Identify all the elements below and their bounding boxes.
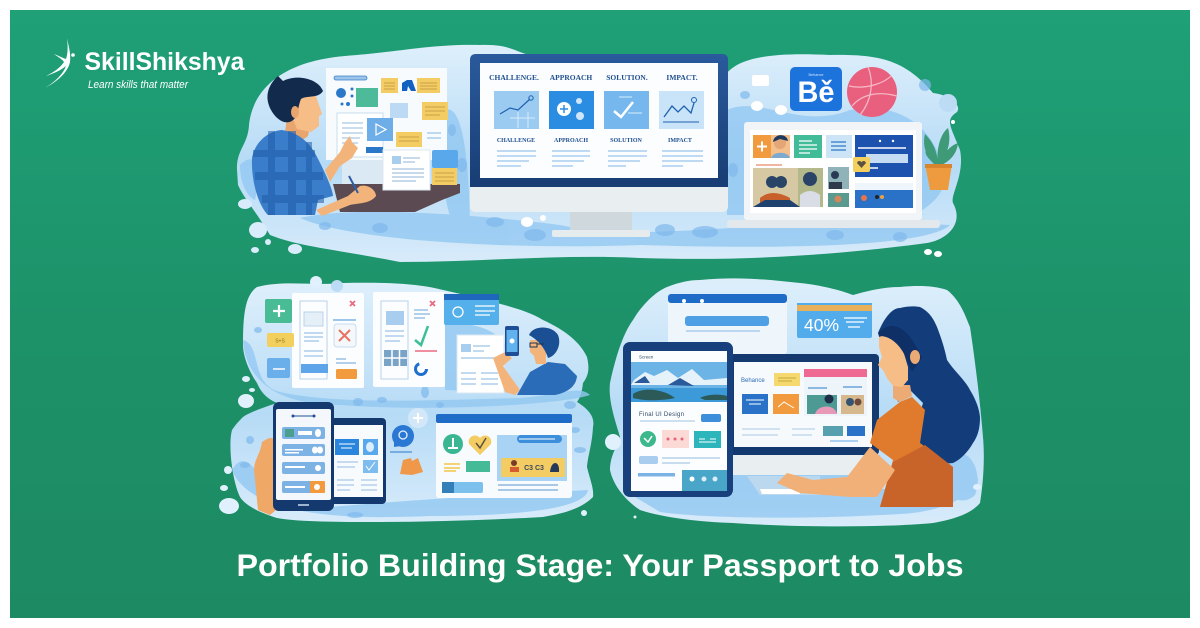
icon: dribbble	[847, 67, 897, 117]
chat check icon	[640, 431, 656, 447]
close mark	[430, 301, 435, 306]
light header	[797, 297, 872, 303]
column subheadings: CHALLENGE	[497, 138, 535, 144]
heart badge	[469, 436, 491, 455]
check	[476, 438, 486, 448]
mountains	[631, 369, 727, 385]
lid	[744, 122, 922, 220]
note lines	[778, 378, 796, 381]
yellow notes	[381, 78, 448, 147]
sky panel	[497, 435, 567, 481]
panel lines	[808, 387, 862, 388]
column headings: APPROACH	[550, 73, 592, 82]
icon: check mark	[415, 326, 428, 345]
row content	[285, 429, 323, 490]
column subheadings	[497, 138, 692, 144]
thumbnail	[386, 311, 404, 325]
tablet behind phone	[326, 418, 386, 504]
woman at computer	[777, 306, 980, 507]
blue wash	[635, 453, 978, 518]
screen	[734, 362, 872, 447]
keys	[760, 489, 800, 494]
speckles	[240, 327, 586, 518]
tablet heading: Screen	[639, 354, 654, 360]
pen	[349, 176, 358, 193]
yellow scene	[501, 458, 565, 477]
tile: impact	[659, 91, 704, 129]
face	[290, 94, 322, 132]
writing arm	[316, 186, 376, 216]
speckles	[319, 79, 931, 242]
thumbnail	[304, 312, 323, 326]
shoreline	[633, 390, 727, 400]
orange book icon	[400, 458, 423, 475]
yellow note tab: S+S	[275, 338, 285, 344]
stat card	[797, 297, 872, 338]
light play tile	[390, 103, 408, 118]
statistic: 40%	[804, 315, 839, 335]
wireframe card with check	[373, 292, 445, 387]
document on board	[337, 113, 383, 157]
light tile	[826, 135, 852, 158]
card header	[855, 183, 913, 190]
footer thumbs	[823, 426, 865, 436]
pink header panel	[804, 369, 867, 416]
yellow sticky	[432, 168, 457, 185]
icon: error cross	[339, 330, 350, 341]
icon: behance: Behance	[808, 73, 824, 77]
keyboard	[747, 476, 820, 495]
neck and face	[530, 340, 546, 364]
orange tile	[773, 394, 799, 414]
column subheadings: APPROACH	[554, 138, 588, 144]
blue rule	[333, 319, 356, 321]
arm	[777, 447, 895, 497]
mountain shadow	[634, 376, 694, 386]
hair	[267, 76, 323, 122]
design title: Final UI Design	[639, 412, 684, 418]
text lines right	[414, 310, 430, 318]
small photo bottom	[828, 193, 849, 207]
small photo top	[828, 167, 849, 189]
pink header	[804, 369, 867, 377]
bezel	[725, 354, 879, 455]
card	[373, 292, 445, 387]
icon: behance	[790, 67, 842, 111]
ear	[291, 106, 299, 118]
wireframe	[300, 301, 327, 379]
action bar	[301, 364, 328, 373]
header dots	[292, 414, 316, 418]
stat lines	[844, 318, 867, 327]
photo group	[753, 168, 823, 207]
screen	[750, 130, 916, 213]
gear dots	[340, 88, 354, 106]
text lines	[385, 331, 404, 341]
orange button	[336, 369, 357, 379]
icon: behance: Bě	[798, 76, 834, 109]
chat bubble	[392, 425, 414, 447]
blue sticky	[432, 150, 458, 168]
document thumb	[461, 344, 471, 352]
green tile lines	[799, 141, 817, 153]
man with phone	[457, 326, 577, 395]
glasses	[530, 343, 544, 347]
blue tile	[742, 394, 768, 414]
cloud backdrop	[610, 278, 984, 526]
base	[552, 230, 650, 237]
desktop monitor	[470, 54, 728, 237]
shirt checks	[253, 131, 324, 215]
blue chip	[442, 482, 483, 493]
pink dots tile	[662, 430, 689, 448]
blue arrow tab	[267, 358, 290, 378]
yellow note tab	[267, 333, 294, 347]
tile: challenge	[494, 91, 539, 129]
wireframe	[381, 301, 408, 379]
screen	[631, 351, 727, 491]
title: Portfolio Building Stage: Your Passport to Jobs	[236, 547, 963, 583]
title bar	[668, 294, 787, 303]
note lines	[384, 83, 445, 141]
blue tile lines	[746, 400, 764, 404]
navy panel	[855, 135, 913, 177]
column headings	[489, 73, 698, 82]
behance and dribbble icons	[790, 67, 897, 117]
board	[326, 68, 447, 160]
pill line	[519, 438, 555, 440]
bottom lines	[498, 485, 558, 490]
check	[366, 462, 375, 470]
tablet screen	[334, 425, 383, 497]
thumbnail	[285, 429, 294, 437]
sticky lines	[435, 173, 454, 181]
caption line	[686, 330, 760, 332]
green circle	[443, 434, 463, 454]
heading lines	[756, 164, 782, 166]
cloud backdrop	[237, 45, 961, 262]
error box	[334, 324, 356, 347]
play tile	[367, 118, 393, 141]
button	[366, 147, 383, 153]
brand name: SkillShikshya	[84, 49, 245, 76]
plus	[757, 142, 767, 152]
chin	[733, 455, 873, 475]
amber band	[797, 305, 872, 311]
green plus tab	[265, 299, 292, 323]
play glyph	[376, 124, 386, 135]
light pill	[639, 456, 658, 464]
bezel	[470, 54, 728, 187]
chin	[470, 187, 728, 212]
board legs shading	[342, 160, 402, 184]
panel: wireframes and responsive design scene	[219, 276, 593, 522]
tile: solution	[604, 91, 649, 129]
photos	[807, 394, 864, 414]
blue label	[638, 473, 675, 476]
ear	[910, 350, 920, 364]
column text lines	[497, 151, 703, 166]
hair back	[878, 306, 980, 463]
card	[292, 293, 364, 388]
phone	[505, 326, 519, 356]
orange tile chart	[778, 402, 794, 408]
top browser	[668, 294, 787, 354]
droplets	[219, 276, 587, 516]
yellow heart tag	[853, 157, 870, 172]
desk	[333, 184, 460, 212]
tile: approach	[549, 91, 594, 129]
banner	[335, 439, 359, 455]
caption line	[390, 451, 412, 453]
panel: final design scene	[605, 278, 984, 526]
document	[457, 335, 504, 393]
footer lines	[742, 429, 815, 435]
blue logo mark	[402, 80, 416, 91]
blue card	[855, 183, 913, 208]
banner lines	[339, 444, 355, 448]
list item rows	[282, 427, 325, 493]
dots	[682, 299, 704, 303]
desktop monitor	[725, 354, 879, 495]
pink rule	[415, 350, 437, 352]
home bar	[298, 504, 309, 506]
lake	[631, 388, 727, 402]
window	[668, 294, 787, 354]
stand	[570, 212, 632, 230]
browser card	[436, 414, 572, 498]
column subheadings: SOLUTION	[610, 138, 642, 144]
man at desk	[252, 76, 460, 216]
hand holding phone	[254, 438, 276, 515]
blue wash	[232, 324, 590, 517]
text lines	[337, 462, 377, 490]
body	[623, 342, 733, 497]
laptop base	[727, 220, 940, 228]
blue pill	[701, 414, 721, 422]
heart	[857, 161, 866, 168]
light tile lines	[831, 142, 846, 150]
phone body	[273, 402, 334, 511]
raised arm	[325, 136, 358, 182]
sky	[631, 362, 727, 402]
panel: case study scene	[237, 45, 961, 262]
blue browser tab	[444, 294, 499, 325]
document lines	[461, 346, 498, 384]
shirt	[252, 130, 333, 215]
phone screen	[276, 409, 331, 500]
storyboard	[326, 68, 448, 184]
avatar tile	[363, 439, 378, 455]
window	[436, 414, 572, 498]
column headings: SOLUTION.	[606, 73, 648, 82]
cloud backdrop	[230, 283, 593, 522]
icon: potted plant	[924, 128, 958, 190]
progress rule	[640, 420, 695, 422]
shirt	[870, 397, 953, 507]
card	[797, 297, 872, 338]
side lines	[427, 133, 441, 138]
search field	[685, 316, 769, 326]
navy panel content	[858, 140, 908, 168]
tablet	[623, 342, 733, 497]
card icons	[861, 195, 884, 201]
arm	[493, 352, 520, 395]
title bar	[436, 414, 572, 423]
green circle glyph	[448, 438, 458, 448]
teal square	[442, 482, 454, 493]
shirt shade	[880, 445, 953, 507]
wireframe card with error	[292, 293, 364, 388]
tablet body	[326, 418, 386, 504]
neck	[893, 385, 912, 402]
paper lines	[392, 158, 424, 181]
column headings: IMPACT.	[666, 73, 698, 82]
hair front	[878, 326, 922, 372]
paper thumb	[392, 156, 401, 164]
teal tile	[694, 431, 721, 448]
avatar	[366, 442, 374, 452]
plus bubble	[408, 408, 428, 428]
gradient tile	[682, 470, 727, 491]
yellow note	[774, 373, 800, 386]
green note	[356, 88, 378, 107]
portrait tile	[771, 135, 790, 158]
check tile	[363, 460, 378, 473]
paper on desk	[383, 150, 430, 190]
screen	[480, 63, 718, 178]
orange action	[310, 481, 325, 493]
neck	[285, 118, 312, 142]
close mark	[350, 301, 355, 306]
column subheadings: IMPACT	[668, 138, 692, 144]
scene content: C3 C3	[524, 465, 544, 472]
laptop	[727, 122, 940, 228]
pill	[517, 435, 562, 443]
column headings: CHALLENGE.	[489, 73, 539, 82]
orange tile	[753, 135, 771, 158]
droplets	[605, 434, 981, 518]
face	[878, 333, 908, 387]
site title: Behance	[741, 378, 765, 384]
icon: leaping figure	[45, 38, 75, 88]
smartphone	[273, 402, 334, 511]
underline	[830, 440, 858, 442]
document lines	[342, 123, 363, 143]
green tile	[794, 135, 822, 158]
droplets	[238, 94, 957, 257]
header control	[294, 415, 314, 417]
blue wash	[240, 106, 950, 247]
small lines	[336, 359, 356, 363]
green button	[466, 461, 490, 472]
portrait	[771, 135, 790, 158]
search bar	[334, 76, 367, 80]
gear icon	[336, 88, 346, 98]
icon grid	[384, 350, 407, 366]
donut chart	[416, 364, 426, 374]
logo	[45, 38, 245, 91]
hair	[529, 328, 559, 358]
tagline: Learn skills that matter	[88, 79, 189, 91]
slider	[662, 458, 720, 463]
shirt	[517, 362, 577, 395]
text lines	[304, 333, 323, 356]
yellow lines	[444, 464, 460, 471]
